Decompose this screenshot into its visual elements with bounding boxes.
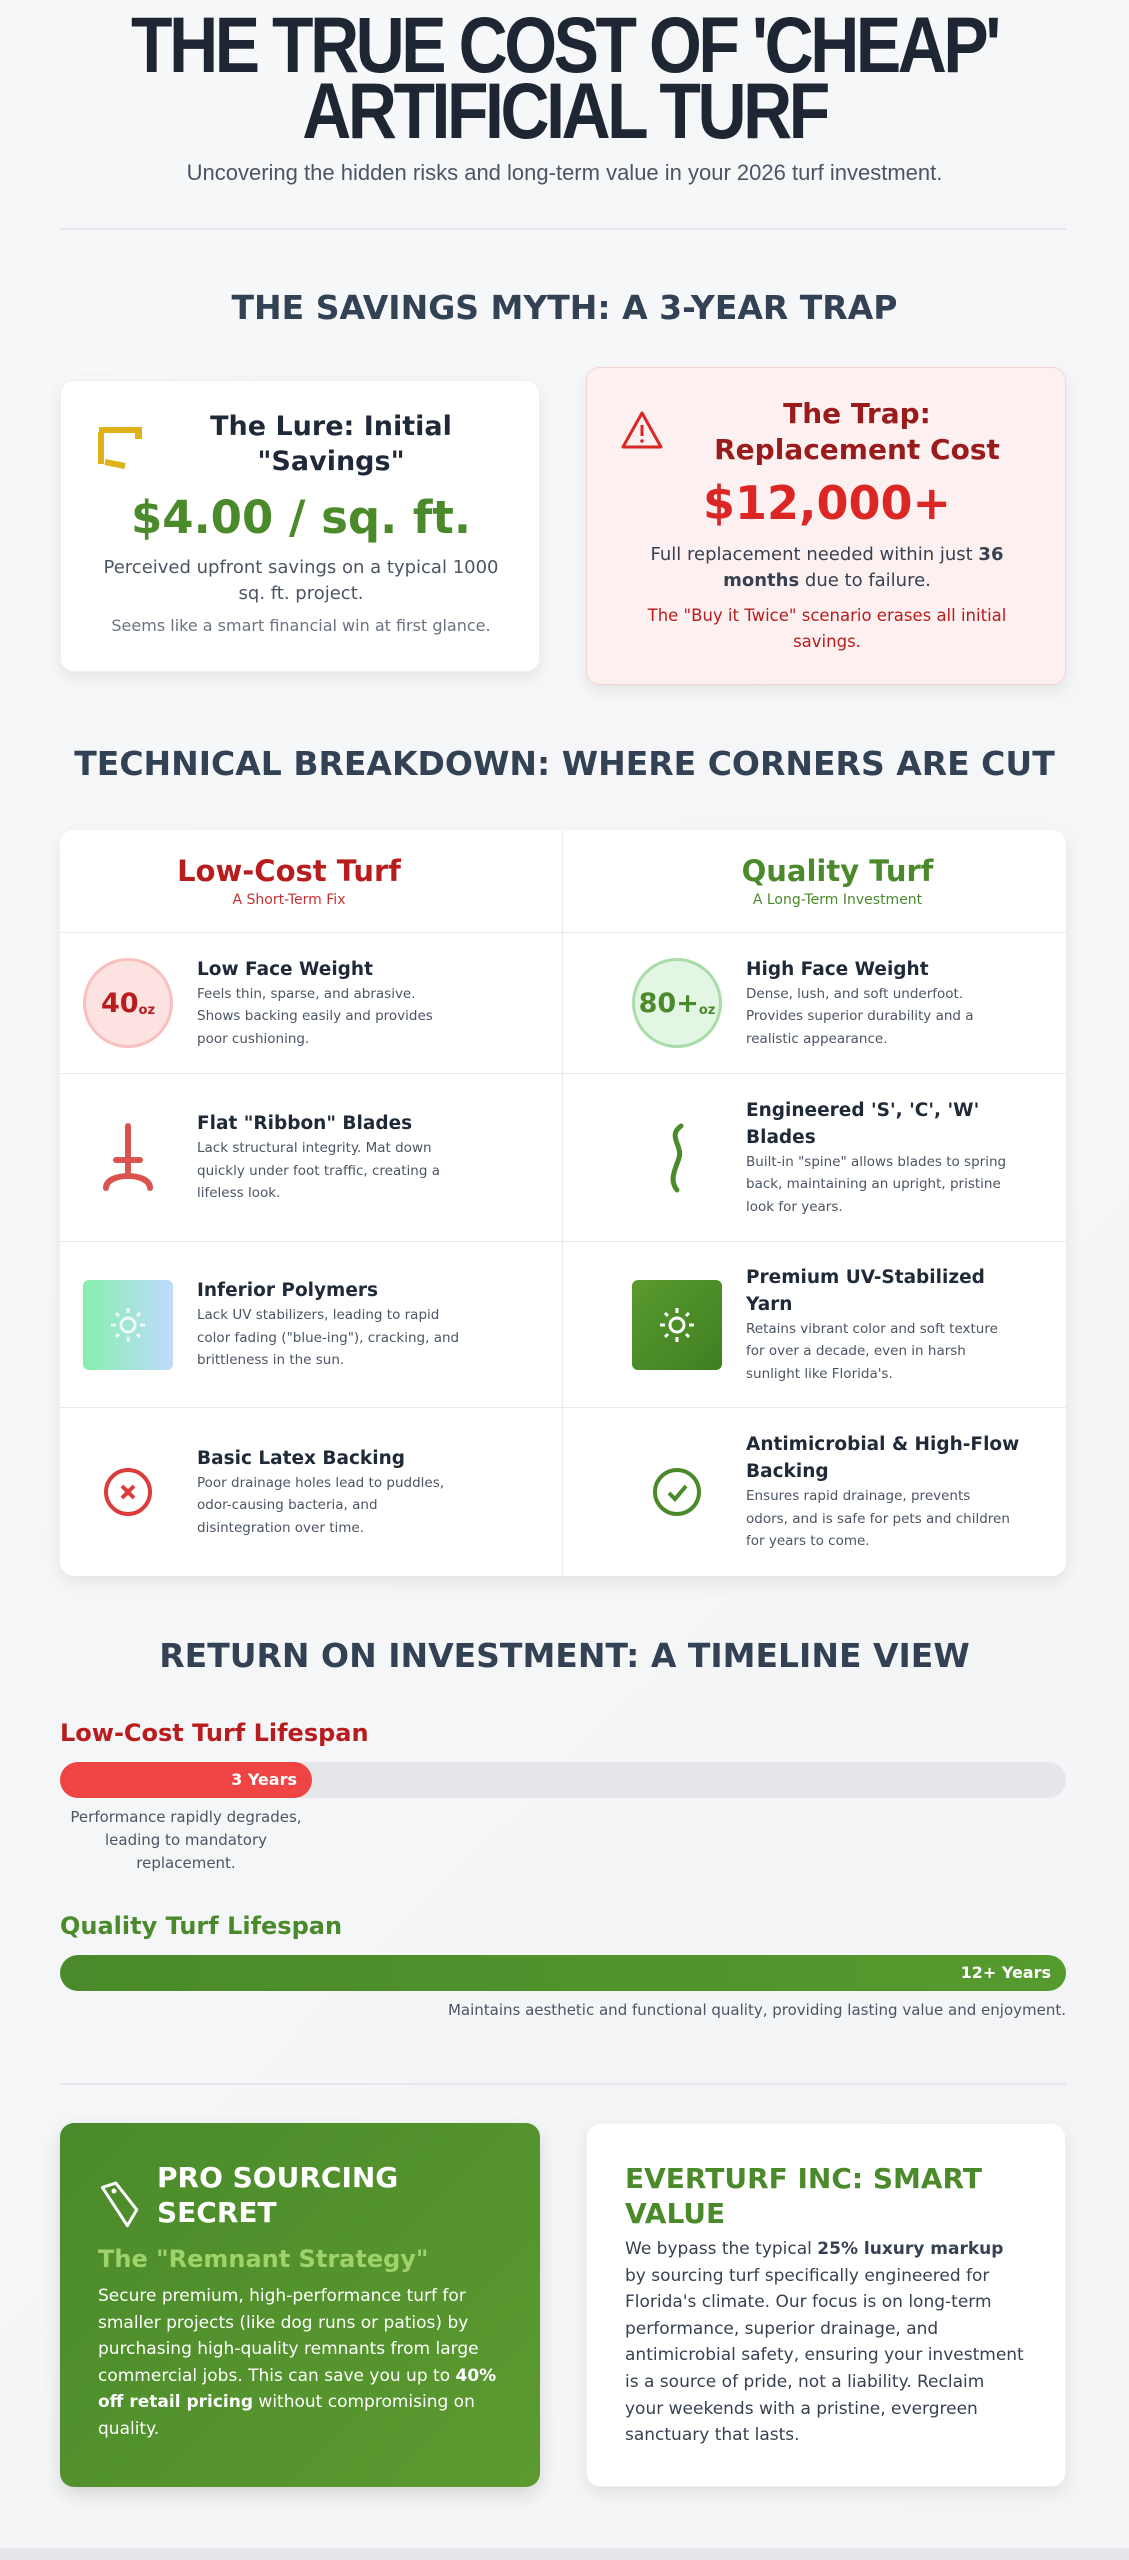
header: low-cost: A Short-Term Fix	[233, 892, 345, 908]
title: ARTIFICIAL TURF	[302, 66, 827, 155]
bar: low-cost: 3 Years	[231, 1770, 297, 1789]
icon: x circle	[104, 1468, 152, 1516]
row: antimicrobial: for years to come.	[746, 1533, 870, 1549]
pro heading	[157, 2161, 398, 2229]
pro subheading: The "Remnant Strategy"	[98, 2245, 428, 2273]
row: high face weight: High Face Weight	[746, 959, 929, 980]
panel: pro sourcing secret	[60, 2123, 540, 2487]
row: engineered blades: Engineered 'S', 'C', 'W'	[746, 1100, 979, 1121]
everturf body	[625, 2239, 1024, 2445]
row: premium uv yarn	[563, 1242, 1066, 1408]
comparison table	[60, 830, 1066, 1576]
row: premium uv yarn: Retains vibrant color and soft texture	[746, 1321, 998, 1337]
row: inferior polymers: brittleness in the sun.	[197, 1352, 344, 1368]
icon: 40oz: 40	[101, 988, 139, 1018]
trap note: The "Buy it Twice" scenario erases all initial	[648, 606, 1006, 625]
icon: faded sun	[83, 1280, 173, 1370]
row: flat blades: Flat "Ribbon" Blades	[197, 1113, 412, 1134]
trap note	[648, 606, 1006, 651]
row: premium uv yarn: Premium UV-Stabilized	[746, 1267, 985, 1288]
row: antimicrobial: Backing	[746, 1461, 829, 1482]
row: premium uv yarn: sunlight like Florida's.	[746, 1366, 893, 1382]
icon: 80+oz: 80+	[639, 988, 699, 1018]
row: antimicrobial: Antimicrobial & High-Flow	[746, 1434, 1019, 1455]
bar: low-cost	[60, 1762, 1066, 1798]
heading: savings myth: THE SAVINGS MYTH: A 3-YEAR TRAP	[232, 288, 897, 327]
row: low face weight: poor cushioning.	[197, 1031, 309, 1047]
icon: 40oz	[83, 958, 173, 1048]
lure description: Perceived upfront savings on a typical 1000	[104, 557, 498, 578]
bar: quality	[60, 1955, 1066, 1991]
row: engineered blades: Built-in "spine" allows blades to spring	[746, 1154, 1006, 1170]
icon: warning	[622, 411, 663, 448]
row: basic latex: Poor drainage holes lead to puddles,	[197, 1475, 444, 1491]
bar: quality: 12+ Years	[961, 1963, 1051, 1982]
lure note: Seems like a smart financial win at first glance.	[111, 616, 491, 635]
everturf heading: VALUE	[625, 2197, 725, 2230]
pro heading: PRO SOURCING	[157, 2161, 398, 2194]
row: flat blades: lifeless look.	[197, 1185, 280, 1201]
title: THE TRUE COST OF 'CHEAP'	[131, 0, 998, 89]
row: inferior polymers: Inferior Polymers	[197, 1280, 378, 1301]
row: flat blades: quickly under foot traffic, creating a	[197, 1163, 440, 1179]
row: basic latex: odor-causing bacteria, and	[197, 1497, 378, 1513]
icon: 80+oz: oz	[699, 1002, 715, 1018]
everturf heading	[625, 2162, 982, 2230]
label: low-cost lifespan: Low-Cost Turf Lifespan	[60, 1719, 369, 1747]
icon: 80+oz	[632, 958, 722, 1048]
lure heading: The Lure: Initial "Savings"	[210, 411, 452, 477]
everturf body: performance, superior drainage, and	[625, 2319, 938, 2339]
panel: the trap	[586, 367, 1066, 685]
row: basic latex: Basic Latex Backing	[197, 1448, 405, 1469]
everturf body: sanctuary that lasts.	[625, 2425, 800, 2445]
header: low-cost	[60, 830, 563, 933]
subtitle: Uncovering the hidden risks and long-term value in your 2026 turf investment.	[187, 160, 942, 185]
header: low-cost: Low-Cost Turf	[177, 854, 401, 888]
row: antimicrobial	[653, 1434, 1019, 1549]
everturf body: by sourcing turf specifically engineered for	[625, 2266, 989, 2286]
lure description: sq. ft. project.	[239, 583, 363, 604]
trap description	[651, 544, 1003, 591]
heading: technical breakdown: TECHNICAL BREAKDOWN: WHERE CORNERS ARE CUT	[74, 744, 1055, 783]
panel: the lure	[60, 380, 540, 672]
row: basic latex	[60, 1408, 563, 1576]
row: low face weight: Low Face Weight	[197, 959, 373, 980]
everturf body: is a source of pride, not a liability. Reclaim	[625, 2372, 984, 2392]
row: engineered blades: back, maintaining an upright, pristine	[746, 1176, 1001, 1192]
row: high face weight: Provides superior durability and a	[746, 1008, 974, 1024]
pro body: Secure premium, high-performance turf for smaller projects (like dog runs or patios) by purchasing high-quality remnants from large commercial jobs. This can save you up to 40% off retail pricing without compromising on quality.	[98, 2286, 496, 2438]
trap description: months due to failure.	[723, 570, 931, 591]
everturf heading: EVERTURF INC: SMART	[625, 2162, 982, 2195]
row: basic latex: disintegration over time.	[197, 1520, 364, 1536]
icon: tag	[100, 2182, 138, 2228]
row: premium uv yarn: for over a decade, even in harsh	[746, 1343, 966, 1359]
pro heading: SECRET	[157, 2196, 277, 2229]
row: high face weight: Dense, lush, and soft underfoot.	[746, 986, 963, 1002]
trap heading	[714, 397, 1000, 466]
header: quality: A Long-Term Investment	[753, 892, 922, 908]
trap price: $12,000+	[703, 476, 951, 530]
row: high face weight	[563, 933, 1066, 1074]
icon: flat blade	[103, 1123, 153, 1191]
lure price: $4.00 / sq. ft.	[131, 491, 471, 544]
row: inferior polymers	[60, 1242, 563, 1408]
row: flat blades	[60, 1074, 563, 1242]
row: inferior polymers: color fading ("blue-ing"), cracking, and	[197, 1330, 459, 1346]
row: engineered blades: look for years.	[746, 1199, 843, 1215]
label: quality lifespan: Quality Turf Lifespan	[60, 1912, 342, 1940]
everturf body: antimicrobial safety, ensuring your investment	[625, 2345, 1024, 2365]
icon: s blade	[670, 1124, 684, 1192]
row: antimicrobial: odors, and is safe for pets and children	[746, 1511, 1010, 1527]
row: engineered blades	[563, 1074, 1066, 1242]
row: inferior polymers: Lack UV stabilizers, leading to rapid	[197, 1307, 439, 1323]
title	[131, 0, 998, 155]
caption: low-cost: Performance rapidly degrades, leading to mandatory replacement.	[70, 1808, 302, 1872]
everturf body: Florida's climate. Our focus is on long-term	[625, 2292, 992, 2312]
icon: 40oz: oz	[139, 1002, 155, 1018]
trap heading: Replacement Cost	[714, 433, 1000, 466]
trap heading: The Trap:	[783, 397, 931, 430]
trap description: Full replacement needed within just 36	[651, 544, 1003, 565]
icon: money	[98, 427, 142, 469]
row: engineered blades: Blades	[746, 1127, 816, 1148]
row: high face weight: realistic appearance.	[746, 1031, 888, 1047]
trap note: savings.	[793, 632, 861, 651]
row: antimicrobial: Ensures rapid drainage, prevents	[746, 1488, 970, 1504]
caption: quality: Maintains aesthetic and functional quality, providing lasting value and enjoyment.	[448, 2001, 1066, 2019]
icon: check circle	[653, 1468, 701, 1516]
header: quality	[563, 830, 1066, 933]
everturf body: your weekends with a pristine, evergreen	[625, 2399, 978, 2419]
header: quality: Quality Turf	[742, 854, 933, 888]
row: flat blades: Lack structural integrity. Mat down	[197, 1140, 432, 1156]
icon: sun	[632, 1280, 722, 1370]
row: premium uv yarn: Yarn	[746, 1294, 792, 1315]
row: low face weight: Feels thin, sparse, and abrasive.	[197, 986, 416, 1002]
lure description	[104, 557, 498, 604]
everturf body: We bypass the typical 25% luxury markup	[625, 2239, 1003, 2259]
row: low face weight: Shows backing easily and provides	[197, 1008, 433, 1024]
heading: roi: RETURN ON INVESTMENT: A TIMELINE VIEW	[159, 1636, 970, 1675]
row: low face weight	[60, 933, 563, 1074]
panel: everturf smart value	[586, 2123, 1066, 2487]
